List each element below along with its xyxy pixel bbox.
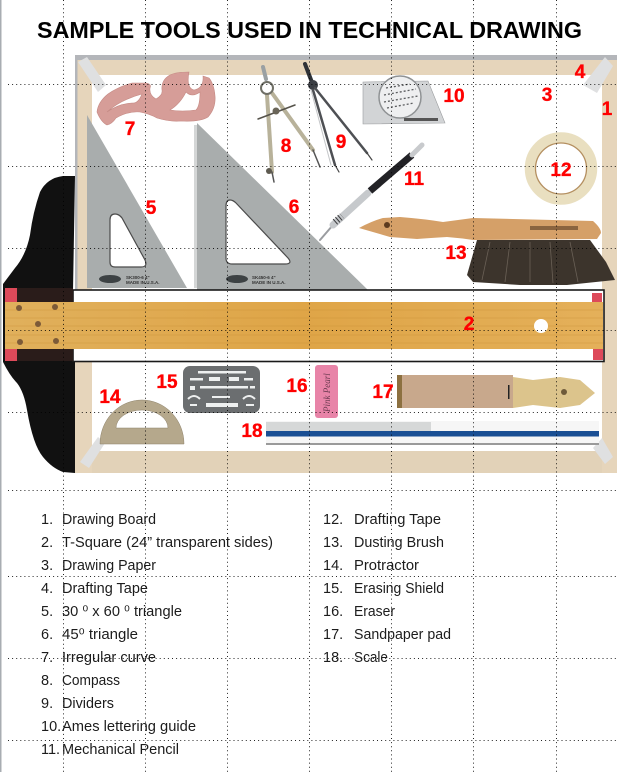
callout numbers: 6 <box>289 197 299 218</box>
legend: right column: Scale <box>354 650 388 666</box>
eraser: Pink Pearl <box>322 373 332 413</box>
callout numbers: 10 <box>443 86 465 107</box>
legend: right column: 15. <box>323 581 343 597</box>
legend: right column: 16. <box>323 604 343 620</box>
callout numbers: 5 <box>146 198 157 219</box>
legend: right column: Sandpaper pad <box>354 627 451 643</box>
legend: left column: Mechanical Pencil <box>62 742 179 758</box>
legend: left column: 10. <box>41 719 61 735</box>
drafting tape pieces <box>78 57 613 468</box>
legend: left column: 6. <box>41 627 53 643</box>
legend: right column: Eraser <box>354 604 395 620</box>
legend: left column: 2. <box>41 535 53 551</box>
legend: left column: 1. <box>41 512 53 528</box>
legend: right column: 14. <box>323 558 343 574</box>
legend: left column: Compass <box>62 673 120 689</box>
callout numbers: 17 <box>372 382 394 403</box>
Ames lettering guide <box>363 76 445 124</box>
triangle 45 <box>194 123 368 290</box>
legend: right column: 18. <box>323 650 343 666</box>
legend: right column: 13. <box>323 535 343 551</box>
callout numbers: 7 <box>125 119 135 140</box>
callout numbers: 9 <box>336 132 346 153</box>
triangle 30x60: SK300-6 4" <box>126 275 150 280</box>
legend: right column: 17. <box>323 627 343 643</box>
irregular curve <box>97 72 215 125</box>
legend: left column: 30 ⁰ x 60 ⁰ triangle <box>62 604 182 620</box>
triangle 45: MADE IN U.S.A. <box>252 280 286 285</box>
legend: left column: 9. <box>41 696 53 712</box>
masking tape roll <box>530 138 592 200</box>
legend: left column: 45⁰ triangle <box>62 627 138 643</box>
legend: right column: Dusting Brush <box>354 535 444 551</box>
legend: left column: 8. <box>41 673 53 689</box>
eraser <box>315 365 338 418</box>
legend: right column <box>323 512 451 666</box>
legend: left column: Drafting Tape <box>62 581 148 597</box>
callout numbers: 12 <box>550 160 572 181</box>
dusting brush <box>359 217 615 285</box>
callout numbers: 1 <box>602 99 613 120</box>
legend: left column: 4. <box>41 581 53 597</box>
legend: left column: 7. <box>41 650 53 666</box>
drawing board frame <box>75 55 617 473</box>
callout numbers: 14 <box>99 387 121 408</box>
legend: right column: 12. <box>323 512 343 528</box>
legend: left column: 3. <box>41 558 53 574</box>
callout numbers: 4 <box>575 62 586 83</box>
triangle 30x60: MADE IN U.S.A. <box>126 280 160 285</box>
sandpaper pad <box>397 375 595 408</box>
legend: right column: Protractor <box>354 558 419 574</box>
callout numbers <box>99 62 613 442</box>
triangle 30x60 <box>87 115 187 288</box>
title: SAMPLE TOOLS USED IN TECHNICAL DRAWING <box>37 17 582 43</box>
protractor <box>100 400 184 444</box>
panel: tools illustration <box>3 55 617 473</box>
triangle 45: SK450-6 4" <box>252 275 276 280</box>
callout numbers: 18 <box>241 421 263 442</box>
callout numbers: 16 <box>286 376 308 397</box>
legend: right column: Drafting Tape <box>354 512 441 528</box>
mechanical pencil <box>320 145 422 240</box>
dividers <box>305 64 372 172</box>
callout numbers: 15 <box>156 372 178 393</box>
callout numbers: 3 <box>542 85 552 106</box>
legend: left column: T-Square (24” transparent sides) <box>62 535 273 551</box>
callout numbers: 11 <box>404 169 424 190</box>
legend: left column: Drawing Board <box>62 512 156 528</box>
legend: left column: Irregular curve <box>62 650 156 666</box>
legend: left column: 11. <box>41 742 60 758</box>
callout numbers: 13 <box>445 243 467 264</box>
legend: left column: Ames lettering guide <box>62 719 196 735</box>
t-square <box>3 176 604 473</box>
legend: left column: Dividers <box>62 696 114 712</box>
scale <box>266 421 599 445</box>
callout numbers: 2 <box>464 314 474 335</box>
callout numbers: 8 <box>281 136 291 157</box>
legend: right column: Erasing Shield <box>354 581 444 597</box>
compass <box>258 67 320 182</box>
legend: left column: 5. <box>41 604 53 620</box>
legend: left column: Drawing Paper <box>62 558 156 574</box>
legend: left column <box>41 512 273 758</box>
erasing shield <box>183 366 260 413</box>
